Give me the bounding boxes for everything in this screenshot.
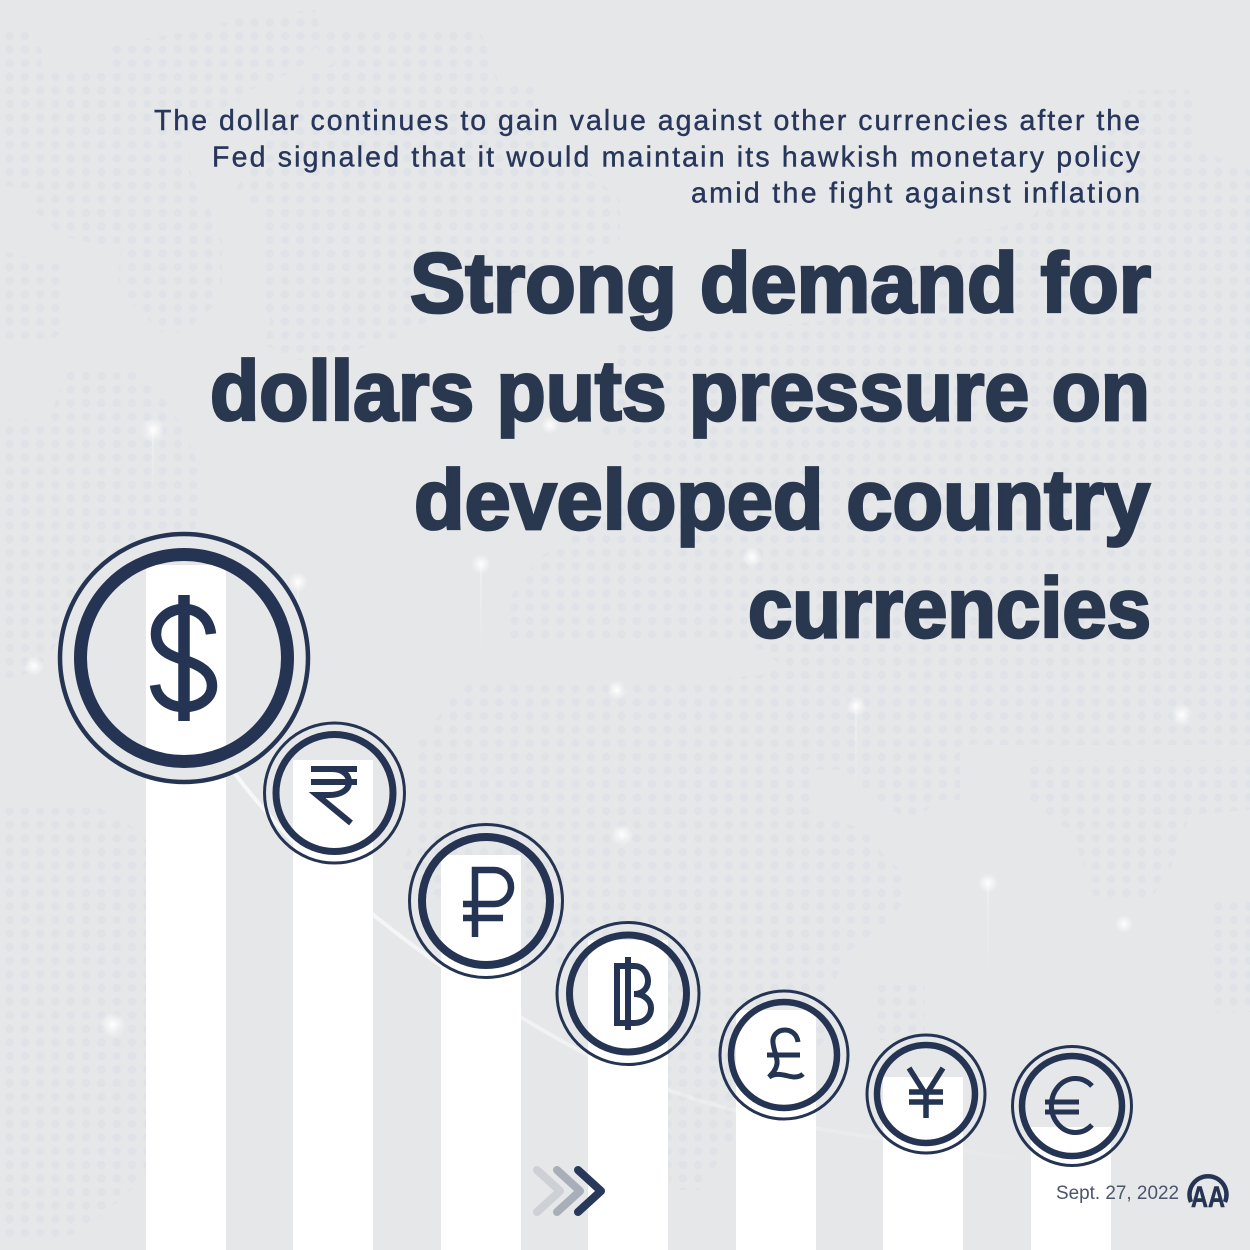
icon: dollar coin	[60, 534, 308, 782]
title: dollars puts pressure on	[210, 344, 1150, 438]
title	[210, 236, 1151, 655]
icon: euro coin	[1012, 1046, 1132, 1166]
icon: baht coin	[557, 922, 699, 1064]
icon: rouble coin	[410, 824, 562, 978]
title: developed country	[414, 453, 1150, 547]
title: currencies	[748, 561, 1151, 655]
bar chart: white columns	[146, 565, 1111, 1250]
icon: AA logo: AA	[1191, 1181, 1225, 1214]
icon: rupee coin	[264, 723, 404, 863]
subtitle: amid the fight against inflation	[691, 178, 1140, 210]
descending trend curve	[232, 770, 1020, 1160]
title: Strong demand for	[410, 236, 1151, 330]
date: Sept. 27, 2022	[1056, 1183, 1179, 1204]
icon: yen coin	[867, 1035, 985, 1153]
sparkle lights	[24, 416, 1193, 1038]
subtitle: Fed signaled that it would maintain its hawkish monetary policy	[212, 142, 1141, 174]
arrow: triple chevrons	[537, 1170, 601, 1212]
subtitle: The dollar continues to gain value against other currencies after the	[154, 105, 1140, 137]
icon: pound coin	[720, 991, 848, 1119]
subtitle	[154, 105, 1141, 210]
